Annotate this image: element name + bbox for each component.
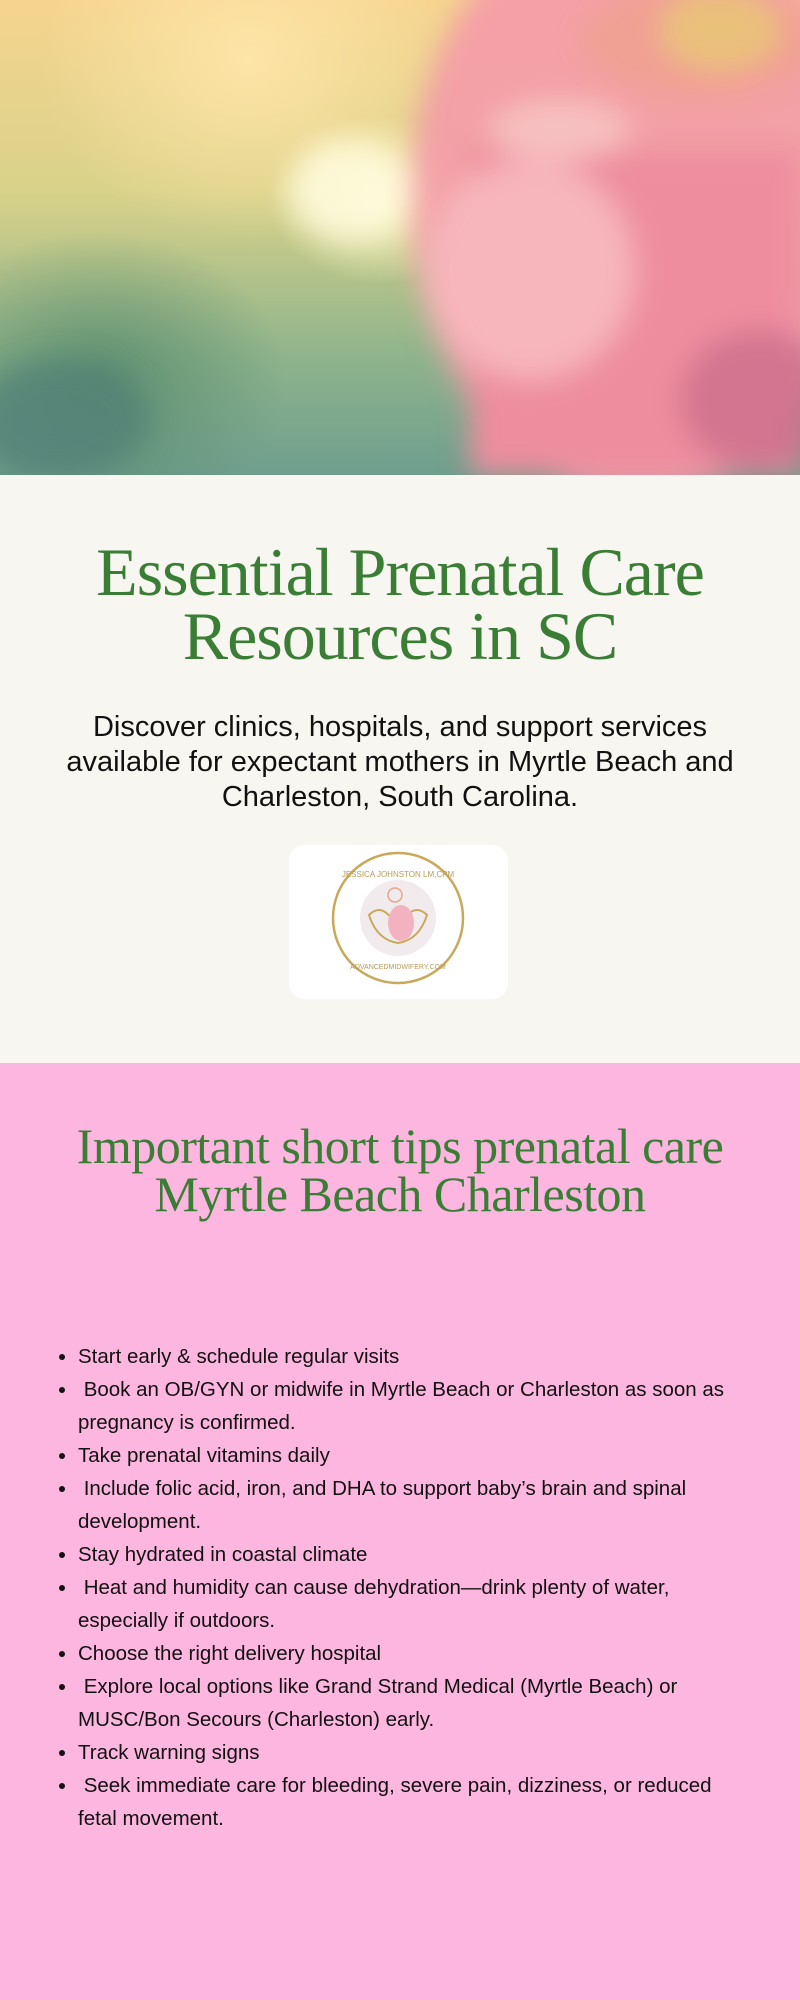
tips list: Choose the right delivery hospital xyxy=(78,1642,381,1665)
tips list: Explore local options like Grand Strand Medical (Myrtle Beach) or MUSC/Bon Secours (Charleston) early. xyxy=(78,1675,677,1731)
tips list xyxy=(59,1345,724,1830)
tips heading xyxy=(77,1118,723,1222)
subtitle: Discover clinics, hospitals, and support services available for expectant mothers in Myrtle Beach and Charleston, South Carolina. xyxy=(66,711,734,813)
tips heading: Important short tips prenatal care xyxy=(77,1118,723,1174)
title: Resources in SC xyxy=(183,598,617,674)
tips list: Seek immediate care for bleeding, severe pain, dizziness, or reduced fetal movement. xyxy=(78,1774,712,1830)
tips list: Take prenatal vitamins daily xyxy=(78,1444,330,1467)
title: Essential Prenatal Care xyxy=(96,534,704,610)
tips list: Stay hydrated in coastal climate xyxy=(78,1543,367,1566)
logo: ADVANCEDMIDWIFERY.COM xyxy=(350,964,446,971)
tips list: Book an OB/GYN or midwife in Myrtle Beach or Charleston as soon as pregnancy is confirmed. xyxy=(78,1378,724,1434)
hero photo: pregnant woman in pink dress xyxy=(0,0,800,475)
tips list: Heat and humidity can cause dehydration—drink plenty of water, especially if outdoors. xyxy=(78,1576,669,1632)
title xyxy=(96,534,704,674)
pink section xyxy=(0,1063,800,2000)
cream section xyxy=(0,475,800,1063)
logo: JESSICA JOHNSTON LM,CPM xyxy=(342,870,454,879)
tips list: Include folic acid, iron, and DHA to support baby’s brain and spinal development. xyxy=(78,1477,686,1533)
tips list: Start early & schedule regular visits xyxy=(78,1345,399,1368)
tips list: Track warning signs xyxy=(78,1741,260,1764)
logo xyxy=(289,845,508,999)
tips heading: Myrtle Beach Charleston xyxy=(154,1166,646,1222)
